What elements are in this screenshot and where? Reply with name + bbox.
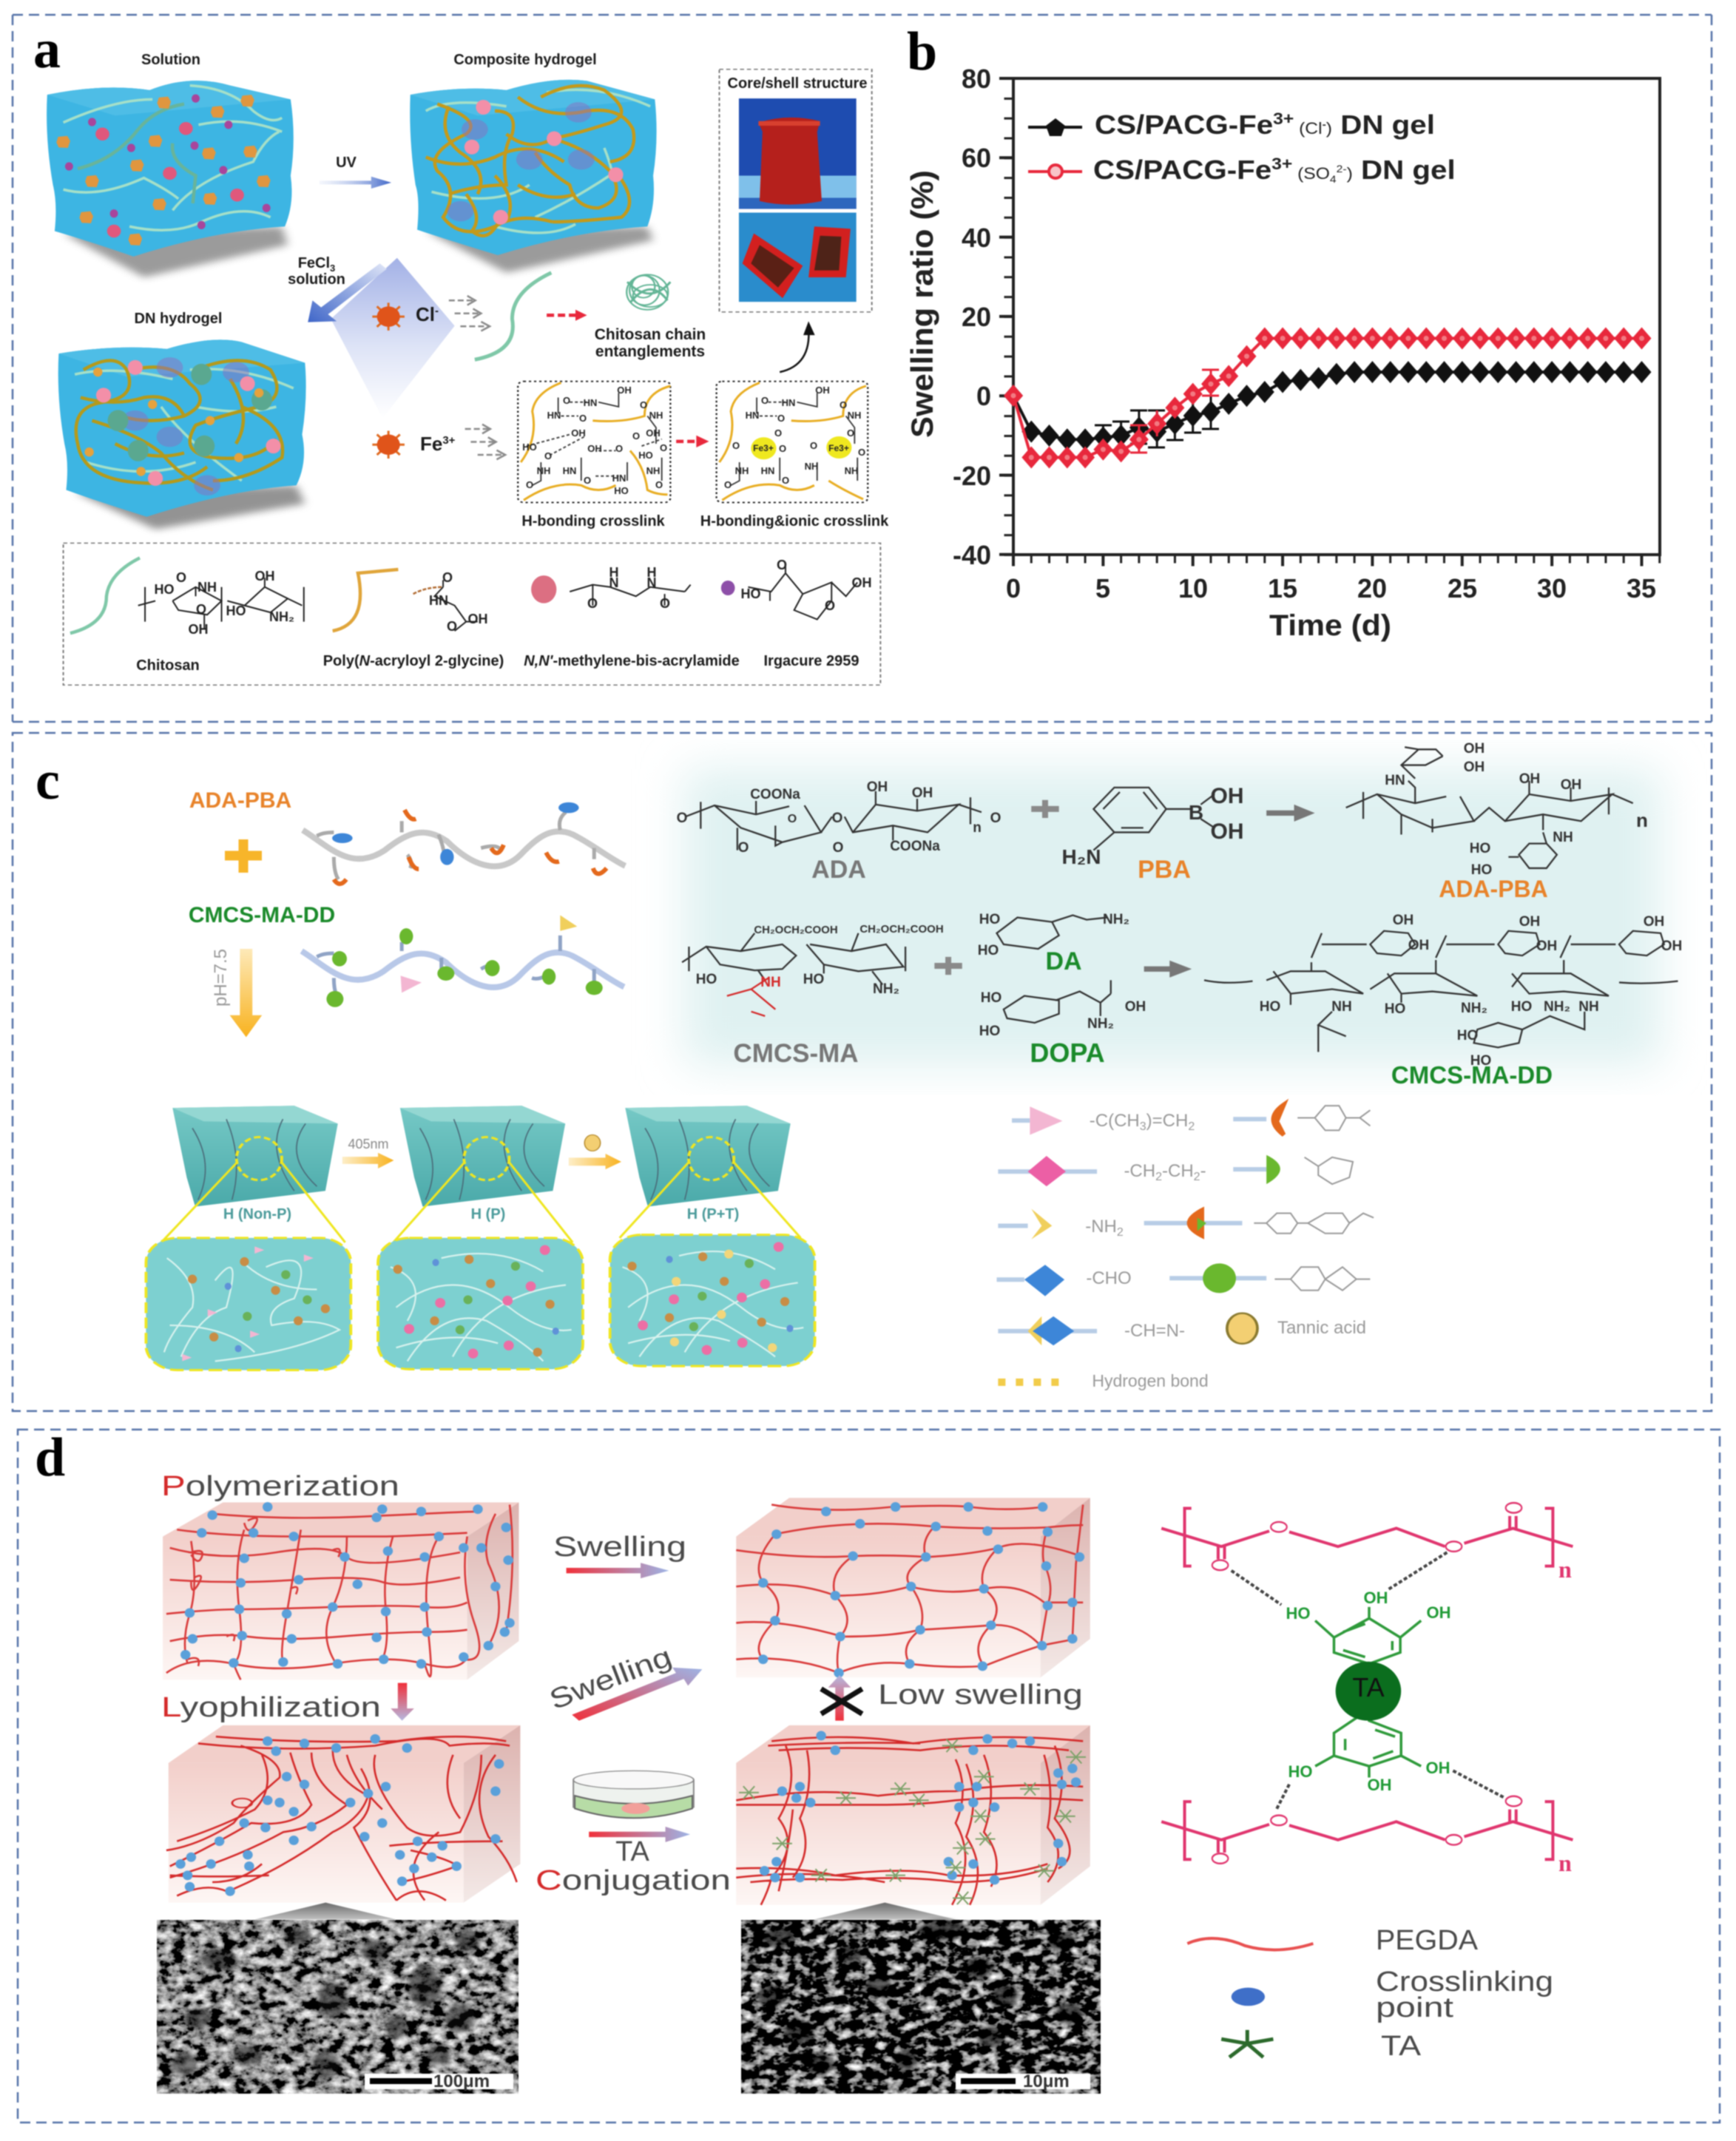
reaction: CMCS-MA + DA/DOPA to CMCS-MA-DD: HO <box>1457 1028 1478 1044</box>
chemical structure: PEGDA-TA hydrogen bonding: n <box>1558 1556 1572 1583</box>
reaction: ADA + PBA to ADA-PBA: HO <box>1471 862 1492 878</box>
legend box: components: HO <box>741 586 760 601</box>
inset: H-bonding crosslink: OH <box>617 385 632 396</box>
inset: H-bonding and ionic crosslink: Fe3+ <box>828 443 849 453</box>
inset: H-bonding crosslink: NH <box>537 465 550 476</box>
inset: H-bonding crosslink: O <box>615 443 623 454</box>
inset: H-bonding and ionic crosslink: O <box>840 399 847 410</box>
arrow: blocked swelling <box>821 1675 862 1721</box>
inset: H-bonding and ionic crosslink: O <box>774 427 782 439</box>
reaction: CMCS-MA + DA/DOPA to CMCS-MA-DD: NH <box>1331 999 1352 1015</box>
y axis tick labels <box>953 64 991 570</box>
inset: H-bonding and ionic crosslink: O <box>847 427 854 439</box>
legend box: components: N <box>646 575 657 590</box>
arrow: TA conjugation <box>589 1827 690 1842</box>
label: pH=7.5: pH=7.5 <box>211 949 231 1007</box>
label: Low swelling: Low swelling <box>878 1680 1083 1711</box>
heading: c: c <box>36 751 60 811</box>
label: PBA: PBA <box>1138 856 1191 884</box>
cube: H (P) <box>394 1106 573 1242</box>
legend: functional groups: Tannic acid <box>1277 1318 1366 1338</box>
reaction: ADA + PBA to ADA-PBA: O <box>990 811 1001 826</box>
legend box: components: OH <box>254 569 275 584</box>
x axis tick labels: 35 <box>1627 573 1656 603</box>
reaction: ADA + PBA to ADA-PBA: n <box>973 820 982 836</box>
y axis tick labels: 0 <box>976 381 991 411</box>
inset: H-bonding crosslink: HN <box>584 397 597 408</box>
inset: H-bonding and ionic crosslink: NH <box>848 410 861 421</box>
zoom box: H (P) network <box>378 1238 583 1369</box>
reaction: CMCS-MA + DA/DOPA to CMCS-MA-DD: HO <box>981 990 1002 1006</box>
inset: H-bonding and ionic crosslink: OH <box>815 385 830 396</box>
chemical structure: PEGDA-TA hydrogen bonding: n <box>1558 1850 1572 1876</box>
legend box: components: HO <box>154 582 175 597</box>
label: FeCl3 solution: FeCl <box>298 255 335 274</box>
label: N,N'-methylene-bis-acrylamide: N,N'-methylene-bis-acrylamide <box>524 653 740 669</box>
label: Swelling (diagonal): Swelling <box>545 1641 676 1716</box>
label: Poly(N-acryloyl 2-glycine): Poly(N-acryloyl 2-glycine) <box>323 653 504 669</box>
reaction: CMCS-MA + DA/DOPA to CMCS-MA-DD: NH₂ <box>1103 912 1129 927</box>
x axis tick labels: 25 <box>1448 573 1477 603</box>
label: Chitosan chain entanglements: entanglements <box>595 343 705 360</box>
label: Chitosan: Chitosan <box>136 657 200 674</box>
SEM micrograph: TA conjugated: 10μm <box>1023 2071 1070 2091</box>
zoom box: H (Non-P) network <box>146 1238 351 1370</box>
heading: a: a <box>33 19 61 80</box>
y axis title: Swelling ratio (%) <box>905 170 939 438</box>
legend: functional groups: 3 <box>1140 1120 1146 1133</box>
heading: d: d <box>35 1427 65 1488</box>
legend box: components: OH <box>467 612 488 626</box>
legend: red series: ) <box>1347 164 1353 183</box>
legend: red series <box>1028 155 1456 186</box>
label: UV: UV <box>336 155 357 171</box>
reaction: ADA + PBA to ADA-PBA: O <box>833 840 843 856</box>
SEM micrograph: TA conjugated <box>741 1903 1101 2094</box>
x axis tick labels: 0 <box>1006 573 1021 603</box>
label: Swelling (top): Swelling <box>553 1532 686 1563</box>
legend box: components: H <box>646 565 657 580</box>
legend box: components: O <box>825 598 835 613</box>
label: Solution: Solution <box>141 52 200 68</box>
inset: H-bonding crosslink: OH <box>646 427 661 439</box>
reaction: ADA + PBA to ADA-PBA: COONa <box>750 787 800 802</box>
label: TA: TA <box>615 1836 650 1867</box>
legend: functional groups: 2 <box>1117 1226 1124 1239</box>
background: synthesis area <box>684 769 1661 1065</box>
label: Fe3+: 3+ <box>442 434 456 447</box>
chemical structure: PEGDA-TA hydrogen bonding: OH <box>1364 1589 1388 1607</box>
inset: H-bonding and ionic crosslink: HN <box>782 397 795 408</box>
label: H (P+T): H (P+T) <box>687 1206 739 1222</box>
panel c: ADA-PBA / CMCS-MA-DD hydrogel <box>13 733 1712 1411</box>
reaction: CMCS-MA + DA/DOPA to CMCS-MA-DD: NH₂ <box>1087 1016 1114 1032</box>
x axis tick labels: 30 <box>1537 573 1567 603</box>
legend: red series: CS/PACG-Fe <box>1093 155 1271 185</box>
reaction: CMCS-MA + DA/DOPA to CMCS-MA-DD: CH₂OCH₂COOH <box>859 923 944 936</box>
legend: PEGDA: PEGDA <box>1376 1925 1479 1956</box>
label: FeCl3 solution: solution <box>288 271 345 288</box>
legend: crosslinking point <box>1232 1966 1553 2023</box>
reaction: ADA + PBA to ADA-PBA: B <box>1189 801 1203 824</box>
inset: H-bonding and ionic crosslink: O <box>724 479 732 490</box>
reaction: ADA + PBA to ADA-PBA: OH <box>1519 771 1540 787</box>
reaction: ADA + PBA to ADA-PBA: O <box>832 811 842 826</box>
diamond: FeCl3 ion exchange <box>308 258 455 419</box>
reaction: ADA + PBA to ADA-PBA: O <box>677 811 687 826</box>
chemical structure: PEGDA-TA hydrogen bonding: HO <box>1289 1762 1312 1781</box>
legend box: components: OH <box>188 622 209 637</box>
reaction: ADA + PBA to ADA-PBA: n <box>1636 809 1648 831</box>
reaction: ADA + PBA to ADA-PBA: NH <box>1553 830 1573 845</box>
legend box: components: OH <box>852 575 871 590</box>
legend: black series: DN gel <box>1340 110 1435 140</box>
legend: functional groups: -CHO <box>1086 1268 1132 1288</box>
cube: swollen network <box>736 1498 1090 1678</box>
legend: black series: (Cl <box>1294 119 1323 138</box>
reaction: CMCS-MA + DA/DOPA to CMCS-MA-DD: OH <box>1519 914 1540 930</box>
reaction: CMCS-MA + DA/DOPA to CMCS-MA-DD: NH₂ <box>1461 1001 1487 1016</box>
legend: red series: 2- <box>1337 164 1347 175</box>
legend: PEGDA <box>1187 1925 1479 1956</box>
SEM micrograph: lyophilized <box>157 1903 519 2094</box>
legend box: components: HN <box>429 593 448 608</box>
x axis title: Time (d) <box>1269 609 1391 642</box>
legend box: components <box>64 543 880 685</box>
reaction: CMCS-MA + DA/DOPA to CMCS-MA-DD <box>682 912 1682 1069</box>
x axis tick labels: 5 <box>1095 573 1110 603</box>
reaction: CMCS-MA + DA/DOPA to CMCS-MA-DD: NH₂ <box>1544 999 1570 1015</box>
label: Conjugation: Conjugation <box>536 1865 731 1896</box>
label: 405nm: 405nm <box>348 1137 389 1151</box>
legend: black series: - <box>1323 120 1326 131</box>
reaction: ADA + PBA to ADA-PBA: O <box>788 813 797 825</box>
reaction: ADA + PBA to ADA-PBA: COONa <box>890 839 940 854</box>
reaction: ADA + PBA to ADA-PBA: OH <box>1210 819 1244 844</box>
reaction: ADA + PBA to ADA-PBA: OH <box>912 785 933 801</box>
inset: H-bonding and ionic crosslink: O <box>761 395 769 406</box>
legend: functional groups: 2 <box>1188 1120 1195 1133</box>
arrow: UV <box>320 177 391 189</box>
legend: functional groups: -NH <box>1085 1217 1117 1237</box>
inset: H-bonding crosslink: HN <box>612 473 626 484</box>
inset: H-bonding and ionic crosslink: HN <box>746 410 759 421</box>
panel b: swelling ratio chart <box>905 15 1712 722</box>
label: H-bonding crosslink: H-bonding crosslink <box>521 513 666 530</box>
label: Irgacure 2959: Irgacure 2959 <box>764 653 859 669</box>
label: Chitosan chain entanglements: Chitosan chain <box>595 326 706 343</box>
inset: H-bonding and ionic crosslink: O <box>782 475 789 486</box>
inset: H-bonding and ionic crosslink: O <box>858 447 865 458</box>
chemical structure: PEGDA-TA hydrogen bonding: OH <box>1426 1759 1450 1777</box>
chemical structure: PEGDA-TA hydrogen bonding: HO <box>1286 1604 1311 1623</box>
inset: H-bonding crosslink: O <box>660 442 667 453</box>
inset: H-bonding and ionic crosslink: O <box>777 413 785 424</box>
icon: gold plus sign <box>225 839 262 873</box>
cube: solution <box>47 81 294 277</box>
inset: H-bonding crosslink: O <box>640 399 647 410</box>
chart frame and ticks <box>1006 77 1661 561</box>
reaction: ADA + PBA to ADA-PBA: OH <box>1464 741 1485 757</box>
x axis tick labels: 15 <box>1268 573 1297 603</box>
reaction: ADA + PBA to ADA-PBA: O <box>738 840 749 856</box>
label: ADA-PBA product: ADA-PBA <box>1439 876 1548 902</box>
reaction: CMCS-MA + DA/DOPA to CMCS-MA-DD: OH <box>1644 914 1664 930</box>
legend box: components: NH <box>197 580 217 595</box>
x axis tick labels: 20 <box>1357 573 1387 603</box>
legend: functional groups: 2 <box>1194 1171 1200 1183</box>
inset: H-bonding and ionic crosslink: NH <box>735 465 749 476</box>
legend: functional groups: )=CH <box>1146 1111 1188 1131</box>
legend: black series <box>1028 109 1435 140</box>
panel a: double network hydrogel preparation <box>13 15 1712 722</box>
legend box: components: O <box>176 570 186 585</box>
inset: H-bonding crosslink: HO <box>614 485 629 496</box>
inset: H-bonding crosslink: O <box>655 479 663 490</box>
inset: H-bonding and ionic crosslink: NH <box>845 465 858 476</box>
y axis tick labels: 80 <box>962 64 991 94</box>
chemical structure: PEGDA-TA hydrogen bonding: OH <box>1426 1603 1451 1622</box>
inset: H-bonding crosslink: O <box>584 475 591 486</box>
icon: ferric ion <box>372 425 505 459</box>
label: ADA-PBA: ADA-PBA <box>189 788 291 813</box>
inset: H-bonding crosslink: NH <box>649 410 663 421</box>
legend: TA <box>1221 2030 1422 2062</box>
photos: core/shell hydrogel <box>719 70 872 312</box>
reaction: CMCS-MA + DA/DOPA to CMCS-MA-DD: HO <box>979 1024 1000 1039</box>
icon: petri dish <box>573 1770 694 1818</box>
legend box: components: O <box>587 596 598 611</box>
inset: H-bonding crosslink: NH <box>646 465 660 476</box>
legend: black series: 3+ <box>1273 109 1294 128</box>
legend: functional groups: Hydrogen bond <box>1092 1371 1209 1390</box>
inset: H-bonding crosslink: HO <box>522 442 537 453</box>
inset: H-bonding and ionic crosslink <box>717 321 868 502</box>
label: H (P): H (P) <box>471 1206 505 1222</box>
icon: chloride ion <box>372 296 490 331</box>
reaction: CMCS-MA + DA/DOPA to CMCS-MA-DD: OH <box>1393 913 1414 928</box>
label: Polymerization: Polymerization <box>161 1471 399 1502</box>
reaction: ADA + PBA to ADA-PBA: HO <box>1470 841 1490 856</box>
label: Lyophilization: Lyophilization <box>161 1692 381 1723</box>
legend: TA: TA <box>1381 2031 1422 2062</box>
cube: DN hydrogel <box>58 339 306 530</box>
inset: H-bonding and ionic crosslink: NH <box>805 461 818 472</box>
arrow: tannic acid addition <box>569 1134 621 1169</box>
reaction: CMCS-MA + DA/DOPA to CMCS-MA-DD: HO <box>1470 1053 1491 1069</box>
label: DA: DA <box>1045 947 1082 975</box>
reaction: CMCS-MA + DA/DOPA to CMCS-MA-DD: HO <box>1385 1001 1405 1017</box>
legend box: components: O <box>447 619 457 634</box>
reaction: ADA + PBA to ADA-PBA <box>677 741 1648 878</box>
x axis tick labels: 10 <box>1178 573 1208 603</box>
ribbon: CMCS-MA-DD chain <box>302 916 624 1007</box>
reaction: ADA + PBA to ADA-PBA: OH <box>867 779 888 795</box>
arrow: lyophilization <box>391 1683 414 1721</box>
reaction: ADA + PBA to ADA-PBA: OH <box>1464 760 1485 775</box>
y axis tick labels: -20 <box>953 461 991 491</box>
legend box: components: O <box>442 570 453 585</box>
chemical structure: PEGDA-TA hydrogen bonding: OH <box>1367 1776 1392 1794</box>
inset: H-bonding crosslink <box>518 382 709 502</box>
inset: H-bonding crosslink: O <box>579 413 587 424</box>
legend box: components: NH₂ <box>269 609 294 624</box>
label: FeCl3 solution: 3 <box>330 263 335 274</box>
inset: H-bonding crosslink: OH <box>571 427 586 439</box>
legend: functional groups: 2 <box>1155 1171 1162 1183</box>
legend box: components: N <box>609 575 618 590</box>
inset: H-bonding crosslink: HN <box>547 410 561 421</box>
inset: H-bonding crosslink: O <box>563 395 570 406</box>
reaction: CMCS-MA + DA/DOPA to CMCS-MA-DD: OH <box>1408 938 1429 953</box>
reaction: CMCS-MA + DA/DOPA to CMCS-MA-DD: NH₂ <box>873 981 899 997</box>
label: Cl-: Cl <box>416 303 435 325</box>
arrow: 405nm <box>342 1153 394 1168</box>
series: CS/PACG-Fe3+ (SO4 2-) red <box>1013 339 1642 460</box>
cube: H (Non-P) <box>161 1106 345 1242</box>
heading: b: b <box>907 21 937 82</box>
legend: functional groups: -CH=N- <box>1124 1321 1185 1341</box>
ribbon: ADA-PBA chain <box>303 802 625 884</box>
legend: red series: 3+ <box>1271 155 1292 173</box>
legend: functional groups: -CH <box>1162 1161 1194 1181</box>
legend: functional groups: - <box>1200 1161 1206 1181</box>
panel d: PEGDA-TA hydrogel <box>18 1427 1720 2123</box>
legend: functional groups <box>997 1105 1374 1390</box>
y axis tick labels: 20 <box>962 302 991 332</box>
x axis tick labels <box>1006 573 1656 603</box>
legend: crosslinking point: point <box>1376 1992 1454 2023</box>
reaction: ADA + PBA to ADA-PBA: OH <box>1561 777 1581 793</box>
reaction: CMCS-MA + DA/DOPA to CMCS-MA-DD: HO <box>979 912 1000 927</box>
reaction: CMCS-MA + DA/DOPA to CMCS-MA-DD: NH <box>760 975 781 990</box>
inset: H-bonding and ionic crosslink: O <box>810 440 817 451</box>
series: CS/PACG-Fe3+ (Cl-) black <box>1013 372 1642 451</box>
reaction: CMCS-MA + DA/DOPA to CMCS-MA-DD: NH <box>1578 999 1599 1015</box>
label: CMCS-MA: CMCS-MA <box>733 1039 859 1068</box>
arrow: gold down <box>230 949 262 1037</box>
reaction: CMCS-MA + DA/DOPA to CMCS-MA-DD: HO <box>803 972 824 987</box>
inset: H-bonding crosslink: O <box>632 430 640 442</box>
legend: red series: (SO <box>1292 164 1330 183</box>
legend box: components: H <box>609 565 618 580</box>
legend box: components: HO <box>226 603 246 618</box>
legend box: components: O <box>196 602 206 617</box>
cube: composite hydrogel <box>410 80 657 273</box>
SEM micrograph: lyophilized: 100μm <box>433 2071 490 2091</box>
reaction: ADA + PBA to ADA-PBA: HN <box>1385 773 1405 788</box>
label: Core/shell structure: Core/shell structure <box>728 75 867 92</box>
reaction: CMCS-MA + DA/DOPA to CMCS-MA-DD: HO <box>1511 999 1532 1015</box>
label: Cl-: - <box>435 305 439 317</box>
cube: lyophilized network <box>166 1725 520 1903</box>
chain: chitosan with red arrow and entanglements <box>475 273 670 359</box>
legend: functional groups: -C(CH <box>1090 1111 1140 1131</box>
reaction: CMCS-MA + DA/DOPA to CMCS-MA-DD: HO <box>696 972 717 987</box>
y axis tick labels: 60 <box>962 143 991 173</box>
label: ADA: ADA <box>811 856 866 884</box>
reaction: CMCS-MA + DA/DOPA to CMCS-MA-DD: HO <box>1260 999 1280 1015</box>
label: DOPA: DOPA <box>1030 1038 1105 1068</box>
inset: H-bonding and ionic crosslink: O <box>732 440 740 451</box>
y axis tick labels: -40 <box>953 540 991 570</box>
arrow: swelling (diagonal) <box>572 1668 702 1721</box>
inset: H-bonding crosslink: HN <box>563 465 576 476</box>
legend: black series: ) <box>1326 119 1332 138</box>
cube: polymerized network <box>163 1502 519 1680</box>
reaction: CMCS-MA + DA/DOPA to CMCS-MA-DD: OH <box>1125 999 1146 1015</box>
reaction: CMCS-MA + DA/DOPA to CMCS-MA-DD: OH <box>1536 938 1557 954</box>
cube: H (P+T) <box>620 1106 800 1238</box>
reaction: CMCS-MA + DA/DOPA to CMCS-MA-DD: CH₂OCH₂COOH <box>754 924 838 936</box>
cube: TA conjugated network <box>736 1725 1090 1905</box>
label: H (Non-P): H (Non-P) <box>223 1206 291 1222</box>
label: CMCS-MA-DD: CMCS-MA-DD <box>189 903 335 927</box>
label: CMCS-MA-DD product: CMCS-MA-DD <box>1391 1061 1553 1089</box>
reaction: ADA + PBA to ADA-PBA: H₂N <box>1062 845 1101 868</box>
legend box: components: O <box>660 596 670 611</box>
label: Composite hydrogel: Composite hydrogel <box>453 52 597 68</box>
legend: red series: DN gel <box>1361 155 1456 185</box>
inset: H-bonding and ionic crosslink: O <box>779 443 786 454</box>
legend: functional groups: -CH <box>1124 1161 1155 1181</box>
inset: H-bonding and ionic crosslink: HN <box>761 465 774 476</box>
reaction: CMCS-MA + DA/DOPA to CMCS-MA-DD: HO <box>978 943 999 958</box>
arrow: swelling (top) <box>567 1563 669 1578</box>
legend box: components: O <box>777 558 787 572</box>
y axis tick labels: 40 <box>962 223 991 253</box>
legend: crosslinking point: Crosslinking <box>1376 1966 1553 1998</box>
chemical structure: PEGDA-TA hydrogen bonding: TA <box>1352 1672 1385 1702</box>
label: H-bonding&ionic crosslink: H-bonding&ionic crosslink <box>700 513 889 530</box>
zoom box: H (P+T) network <box>610 1235 815 1366</box>
label: DN hydrogel: DN hydrogel <box>135 311 222 327</box>
legend: black series: CS/PACG-Fe <box>1095 110 1273 140</box>
label: Fe3+: Fe <box>420 433 442 455</box>
reaction: CMCS-MA + DA/DOPA to CMCS-MA-DD: OH <box>1661 938 1682 954</box>
inset: H-bonding crosslink: O <box>544 450 552 461</box>
inset: H-bonding crosslink: HO <box>638 450 653 461</box>
legend: red series: 4 <box>1330 175 1337 186</box>
reaction: ADA + PBA to ADA-PBA: OH <box>1210 784 1244 808</box>
inset: H-bonding crosslink: OH <box>587 443 602 454</box>
inset: H-bonding and ionic crosslink: Fe3+ <box>753 443 774 453</box>
inset: H-bonding crosslink: O <box>526 479 533 490</box>
chemical structure: PEGDA-TA hydrogen bonding <box>1161 1503 1573 1876</box>
